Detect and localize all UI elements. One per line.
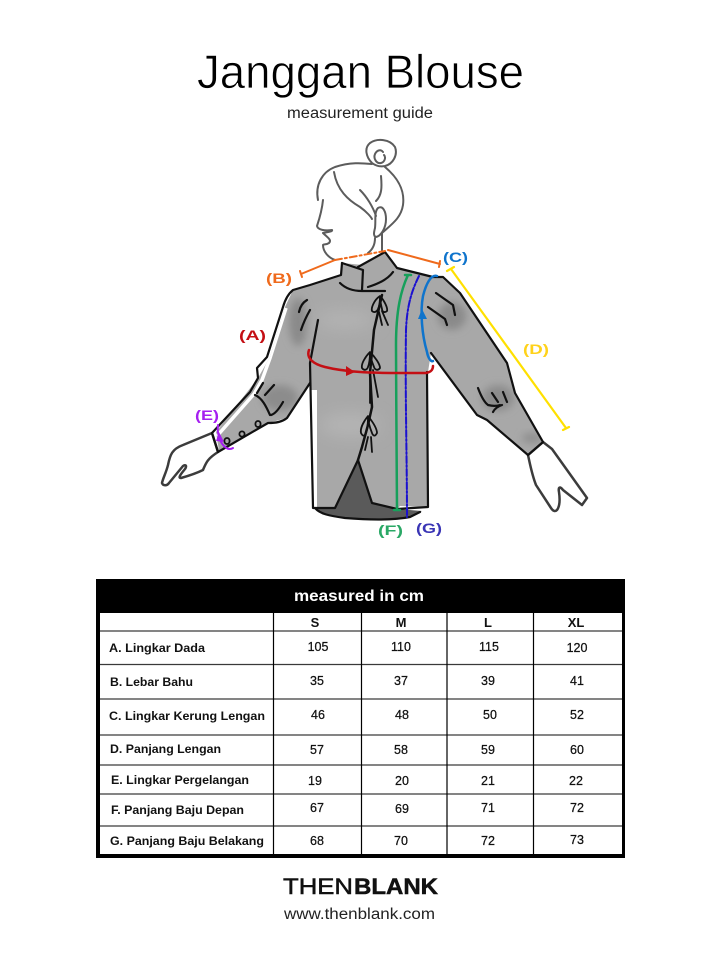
website url: www.thenblank.com bbox=[283, 906, 435, 923]
line C: armhole bbox=[418, 276, 437, 361]
measurement lines bbox=[216, 250, 569, 517]
line F: front length bbox=[394, 275, 411, 510]
measurement labels: (A) bbox=[239, 327, 266, 343]
line D: sleeve length bbox=[447, 267, 569, 430]
illustration: figure wearing blouse bbox=[162, 140, 587, 530]
size M values: 69 bbox=[395, 802, 409, 816]
column headers bbox=[311, 615, 584, 630]
column headers: M bbox=[396, 615, 406, 630]
brand logo: THEN bbox=[283, 874, 353, 899]
size M values: 37 bbox=[394, 674, 408, 688]
size M values: 48 bbox=[395, 708, 409, 722]
size M values: 20 bbox=[395, 774, 409, 788]
row labels: F. Panjang Baju Depan bbox=[111, 803, 244, 817]
size table bbox=[96, 579, 625, 858]
line G: back length bbox=[406, 276, 419, 517]
head and hair bbox=[317, 140, 403, 260]
brand logo bbox=[283, 874, 439, 899]
measurement labels: (F) bbox=[378, 522, 403, 538]
title: Janggan Blouse bbox=[197, 45, 524, 98]
size L values: 72 bbox=[481, 834, 495, 848]
blouse outline bbox=[212, 252, 543, 509]
measurement labels: (G) bbox=[416, 520, 442, 536]
column headers: XL bbox=[568, 615, 584, 630]
size L values: 39 bbox=[481, 674, 495, 688]
row labels: B. Lebar Bahu bbox=[110, 675, 193, 689]
measurement labels: (D) bbox=[523, 341, 549, 357]
size L values: 115 bbox=[479, 640, 499, 654]
row labels: E. Lingkar Pergelangan bbox=[111, 773, 249, 787]
left hand bbox=[162, 433, 218, 485]
row labels bbox=[109, 641, 265, 848]
size S values: 57 bbox=[310, 743, 324, 757]
size S values: 68 bbox=[310, 834, 324, 848]
right hand bbox=[528, 442, 587, 511]
row labels: D. Panjang Lengan bbox=[110, 742, 221, 756]
size M values bbox=[391, 640, 411, 848]
size XL values: 72 bbox=[570, 801, 584, 815]
size XL values: 120 bbox=[567, 641, 587, 655]
table grid bbox=[100, 613, 622, 854]
line E: wrist bbox=[216, 425, 233, 449]
size XL values: 22 bbox=[569, 774, 583, 788]
table frame bbox=[96, 579, 625, 858]
measurement labels: (C) bbox=[443, 249, 468, 265]
size S values: 19 bbox=[308, 774, 322, 788]
size M values: 110 bbox=[391, 640, 411, 654]
size XL values: 60 bbox=[570, 743, 584, 757]
size M values: 70 bbox=[394, 834, 408, 848]
line A: chest bbox=[308, 350, 433, 376]
size L values: 21 bbox=[481, 774, 495, 788]
size L values: 71 bbox=[481, 801, 495, 815]
measurement labels: (E) bbox=[195, 407, 219, 423]
column headers: S bbox=[311, 615, 320, 630]
size XL values: 52 bbox=[570, 708, 584, 722]
size L values: 59 bbox=[481, 743, 495, 757]
row labels: G. Panjang Baju Belakang bbox=[110, 834, 264, 848]
size L values: 50 bbox=[483, 708, 497, 722]
blouse ties bbox=[361, 296, 388, 452]
row labels: A. Lingkar Dada bbox=[109, 641, 205, 655]
brand logo: BLANK bbox=[354, 874, 439, 899]
blouse body fill with shading bbox=[216, 254, 542, 508]
size XL values bbox=[567, 641, 587, 847]
row labels: C. Lingkar Kerung Lengan bbox=[109, 709, 265, 723]
line B: shoulder width bbox=[300, 250, 440, 277]
size S values: 105 bbox=[308, 640, 328, 654]
measurement labels: (B) bbox=[266, 270, 292, 286]
blouse hem lining bbox=[315, 460, 422, 519]
size S values bbox=[308, 640, 328, 848]
size XL values: 73 bbox=[570, 833, 584, 847]
column headers: L bbox=[484, 615, 492, 630]
size S values: 46 bbox=[311, 708, 325, 722]
table heading: measured in cm bbox=[294, 588, 424, 605]
size XL values: 41 bbox=[570, 674, 584, 688]
sleeve folds and cuff buttons bbox=[224, 293, 507, 444]
subtitle: measurement guide bbox=[287, 105, 433, 122]
measurement labels bbox=[195, 249, 549, 538]
size S values: 35 bbox=[310, 674, 324, 688]
size L values bbox=[479, 640, 499, 848]
size S values: 67 bbox=[310, 801, 324, 815]
size M values: 58 bbox=[394, 743, 408, 757]
